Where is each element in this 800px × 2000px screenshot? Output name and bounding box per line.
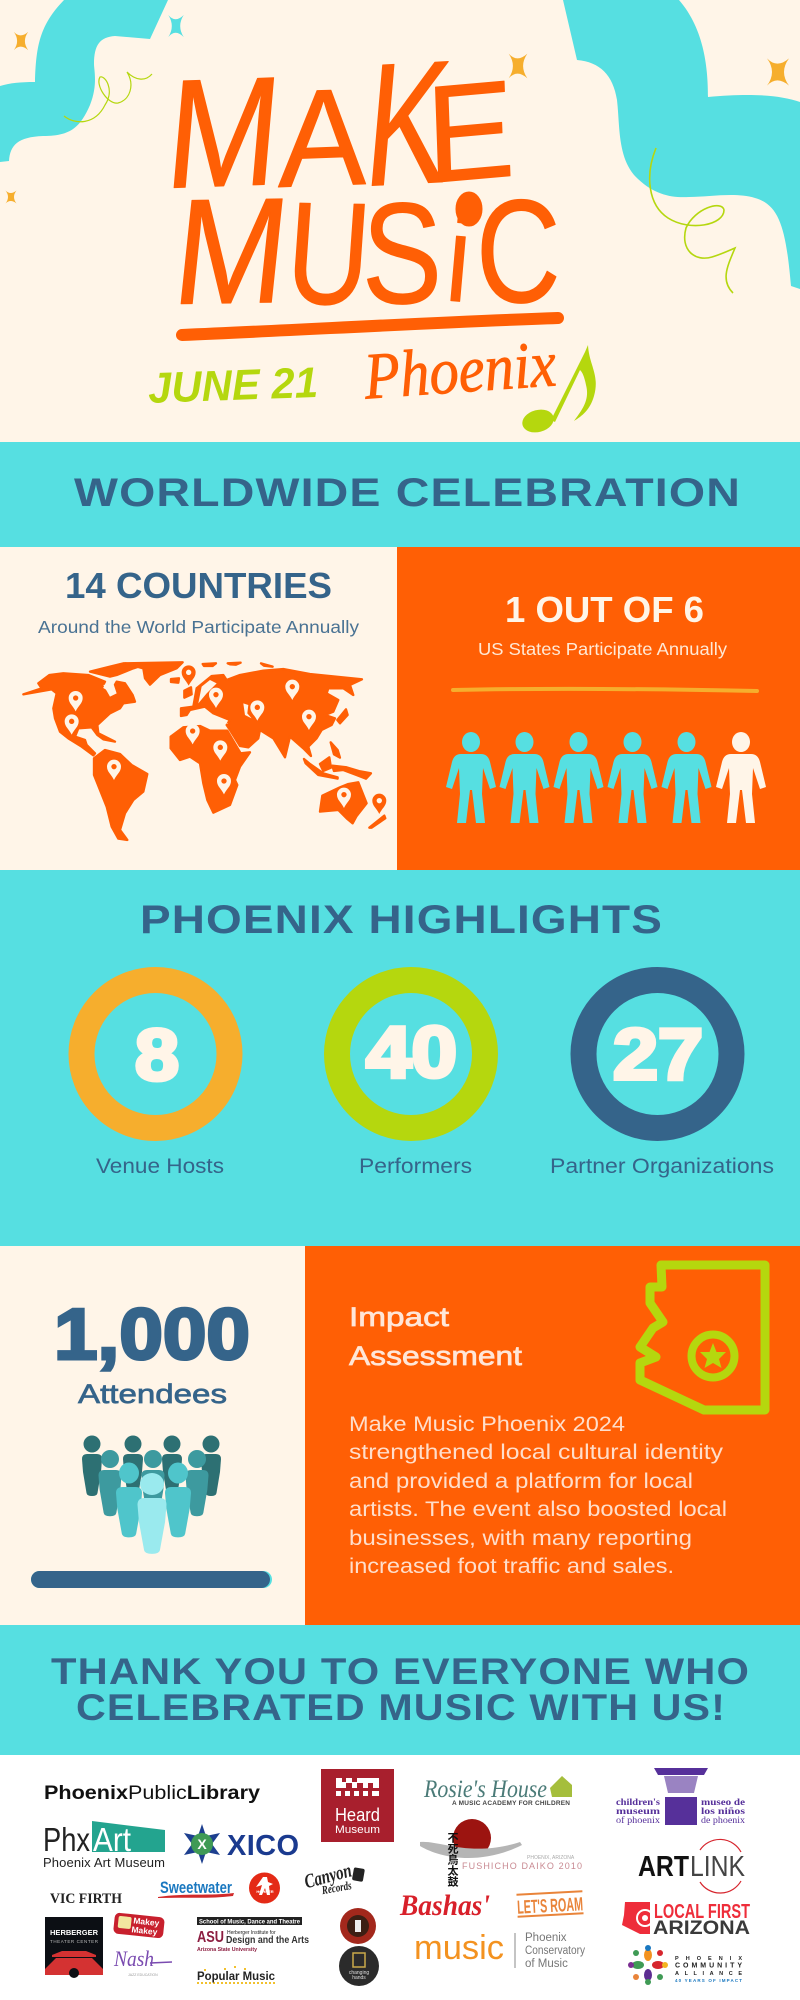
icon: six people: [446, 732, 766, 823]
heading: impact assessment: [349, 1302, 523, 1371]
logo: children's museum: [616, 1768, 745, 1826]
body text: strengthened local cultural identity: [349, 1441, 724, 1464]
sparkle: centre amber: [509, 54, 527, 78]
logo: hohner: HOHNER: [256, 1889, 274, 1894]
logo: local first arizona: [622, 1901, 750, 1939]
title: Music: S: [362, 174, 442, 335]
world map: [23, 662, 386, 840]
logo: xico: XICO: [227, 1830, 299, 1862]
logo: the nash: Nash: [113, 1946, 154, 1971]
panel: header: [0, 0, 800, 442]
banner: thank you: THANK YOU TO EVERYONE WHO: [51, 1651, 750, 1692]
banner: thank you: CELEBRATED MUSIC WITH US!: [76, 1687, 726, 1728]
logo: artlink: LINK: [690, 1851, 746, 1883]
logo: makey makey: Makey: [131, 1924, 158, 1937]
logo: changing hands: changing: [349, 1970, 369, 1976]
title: Make: A: [277, 59, 368, 217]
logo: asu herberger: [197, 1917, 309, 1953]
body text: and provided a platform for local: [349, 1470, 693, 1493]
logo: xico: [184, 1824, 299, 1864]
banner: worldwide celebration: [0, 442, 800, 547]
sparkle: teal: [168, 15, 184, 37]
banner: worldwide celebration: WORLDWIDE CELEBRATION: [74, 471, 741, 515]
icon: crowd: [82, 1436, 221, 1554]
title: Music: C: [476, 170, 560, 334]
panel: phoenix highlights: [0, 870, 800, 1246]
squiggle: right: [650, 148, 735, 293]
title: Make: [160, 25, 517, 224]
heading: impact assessment: Impact: [349, 1302, 450, 1332]
title: Make: E: [424, 51, 517, 213]
logo: phoenix community alliance: ALLIANCE: [675, 1971, 742, 1977]
banner: thank you: [0, 1625, 800, 1755]
logo: phoenix conservatory of music: music: [414, 1929, 504, 1967]
panel: 14 countries: Around the World Participate Annually: [38, 617, 359, 637]
logo: phoenix public library: Phoenix Public Library: [44, 1783, 260, 1804]
logo: sweetwater: Sweetwater: [160, 1878, 232, 1897]
logo: phoenix art museum: [43, 1821, 165, 1870]
logo: changing hands: hands: [352, 1975, 366, 1981]
body text: businesses, with many reporting: [349, 1527, 692, 1550]
logo: let's roam: [516, 1890, 584, 1919]
logo: phoenix art museum: Art: [93, 1821, 131, 1858]
logo: heard museum: Heard: [335, 1805, 380, 1825]
squiggle: left: [64, 72, 152, 122]
logo: phoenix conservatory of music: Conservatory: [525, 1945, 585, 1957]
logo: children's museum: de phoenix: [701, 1816, 745, 1826]
wave: top right: [563, 0, 800, 289]
divider line: [453, 689, 757, 691]
logo: fushicho daiko: PHOENIX, ARIZONA: [527, 1855, 575, 1861]
title: Make: M: [160, 44, 288, 221]
logo: fushicho daiko: 不死鳥太鼓: [445, 1832, 461, 1888]
stat: venue hosts: 8: [135, 1016, 179, 1096]
stat: partner organizations: Partner Organizations: [550, 1155, 774, 1178]
panel: 14 countries: [0, 547, 397, 870]
title: Music: U: [282, 172, 375, 336]
logo: heard museum: Museum: [335, 1824, 380, 1836]
logo: herberger theater center: HERBERGER: [50, 1928, 99, 1937]
logo: phoenix community alliance: COMMUNITY: [675, 1962, 742, 1970]
sparkle: left amber: [14, 32, 28, 50]
logo: vic firth: VIC FIRTH: [50, 1891, 122, 1907]
logo: makey makey: [113, 1912, 165, 1939]
logo: the nash: JAZZ EDUCATION: [128, 1973, 158, 1977]
logo: the nash: [113, 1946, 172, 1977]
logo: artlink: ART: [638, 1851, 689, 1883]
sparkle: right amber: [767, 58, 789, 86]
stat: venue hosts: [82, 980, 230, 1178]
panel: 1 out of 6: US States Participate Annually: [478, 639, 727, 659]
logo: phoenix conservatory of music: [414, 1929, 585, 1970]
logo: herberger theater center: THEATER CENTER: [50, 1939, 99, 1944]
date: June 21: JUNE 21: [147, 359, 319, 413]
body text: artists. The event also boosted local: [349, 1498, 727, 1521]
stat: partner organizations: [550, 980, 774, 1178]
title underline: [182, 318, 558, 335]
logo: makey makey: Makey: [133, 1915, 160, 1928]
logo: rosie's house: A MUSIC ACADEMY FOR CHILDREN: [452, 1800, 570, 1807]
logo: asu herberger: Herberger Institute for: [227, 1930, 276, 1936]
logo: children's museum: los niños: [701, 1807, 745, 1817]
logo: asu herberger: ASU: [197, 1929, 224, 1946]
logo: let's roam: LET'S ROAM: [517, 1894, 584, 1919]
logo: canyon records: Records: [320, 1878, 353, 1897]
panel: sponsor logos: [0, 1755, 800, 2000]
logo: phoenix art museum: Phx: [43, 1821, 90, 1858]
logo: fushicho daiko: [420, 1819, 582, 1888]
panel: 14 countries: 14 COUNTRIES: [65, 565, 332, 606]
logo: rosie's house: Rosie's House: [423, 1776, 547, 1803]
logo: phoenix community alliance: 40 YEARS OF IMPACT: [675, 1978, 742, 1983]
stat: performers: 40: [366, 1013, 457, 1093]
title: Make: K: [359, 25, 458, 224]
logo: asu herberger: Design and the Arts: [226, 1935, 309, 1946]
logo: asu herberger: School of Music, Dance and Theatre: [199, 1920, 301, 1926]
body text: increased foot traffic and sales.: [349, 1555, 674, 1578]
logo: artlink: [638, 1839, 746, 1893]
logo: local first arizona: LOCAL FIRST: [654, 1901, 750, 1923]
logo: hohner: [249, 1872, 280, 1904]
logo: xico: X: [197, 1836, 207, 1852]
logo: popular music: Popular Music: [197, 1969, 275, 1983]
logo: phoenix art museum: Phoenix Art Museum: [43, 1855, 165, 1870]
wave: top left: [0, 0, 168, 162]
logo: children's museum: museum: [616, 1807, 660, 1817]
logo: local first arizona: ARIZONA: [653, 1918, 750, 1939]
title: Music: [167, 167, 560, 337]
panel: 1 out of 6: [397, 547, 800, 870]
logo: children's museum: children's: [616, 1798, 660, 1808]
logo: chipotle: [340, 1908, 376, 1944]
panel: attendees: Attendees: [78, 1379, 227, 1409]
stat: performers: [337, 980, 485, 1178]
logo: children's museum: museo de: [701, 1798, 745, 1808]
logo: asu herberger: Arizona State University: [197, 1947, 257, 1953]
logo: fushicho daiko: FUSHICHO DAIKO 2010: [462, 1861, 582, 1871]
body text: Make Music Phoenix 2024: [349, 1413, 625, 1436]
icon: music note: [520, 345, 596, 436]
location: Phoenix: Phoenix: [361, 327, 558, 414]
title: Music: i: [442, 190, 476, 328]
panel: phoenix highlights: PHOENIX HIGHLIGHTS: [140, 898, 663, 942]
panel: impact assessment: [305, 1246, 800, 1625]
logo: heard museum: [321, 1769, 394, 1842]
body text: [349, 1413, 727, 1578]
title: Music: M: [167, 167, 297, 337]
stat: performers: Performers: [359, 1155, 472, 1178]
logo: changing hands: [339, 1946, 379, 1986]
panel: 1 out of 6: 1 OUT OF 6: [505, 589, 704, 630]
logo: phoenix community alliance: PHOENIX: [675, 1956, 742, 1962]
logo: phoenix conservatory of music: Phoenix: [525, 1932, 567, 1944]
logo: children's museum: of phoenix: [616, 1815, 660, 1826]
logo: phoenix community alliance: [628, 1945, 742, 1985]
panel: attendees: [0, 1246, 305, 1625]
progress bar: [31, 1571, 272, 1588]
heading: impact assessment: Assessment: [349, 1341, 523, 1371]
logo: bashas': Bashas': [399, 1889, 490, 1922]
logo: phoenix conservatory of music: of Music: [525, 1958, 568, 1970]
logo: canyon records: Canyon: [302, 1860, 354, 1893]
stat: venue hosts: Venue Hosts: [96, 1155, 224, 1178]
icon: arizona outline: [640, 1265, 765, 1410]
stat: partner organizations: 27: [613, 1015, 703, 1095]
logo: herberger theater center: [45, 1917, 103, 1978]
sparkle: small amber: [6, 190, 16, 204]
panel: attendees: 1,000: [54, 1295, 250, 1375]
